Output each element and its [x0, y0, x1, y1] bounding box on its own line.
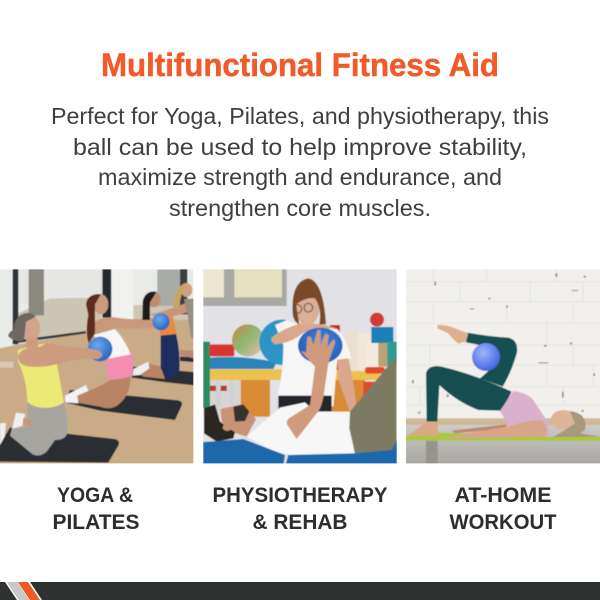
- description text: ball can be used to help improve stability,: [73, 134, 527, 160]
- title: Multifunctional Fitness Aid: [101, 47, 499, 83]
- woman in orange top: [133, 291, 197, 379]
- mats: [0, 357, 197, 463]
- label: at-home workout: WORKOUT: [450, 510, 556, 534]
- woman bridge pose: [407, 325, 600, 438]
- label: yoga and pilates: YOGA &: [57, 483, 133, 507]
- label: at-home workout: [450, 483, 556, 534]
- blue ball between legs: [472, 343, 500, 371]
- photo panel: at-home workout: [403, 266, 600, 467]
- foam rollers: [330, 313, 397, 400]
- patient: [204, 330, 397, 455]
- label: at-home workout: AT-HOME: [454, 483, 552, 507]
- exercise balls: [232, 324, 264, 356]
- woman in background: [173, 283, 197, 338]
- treatment table: [203, 438, 397, 464]
- therapist: [271, 278, 356, 413]
- label: physiotherapy and rehab: PHYSIOTHERAPY: [212, 483, 388, 507]
- woman in pink shorts: [65, 294, 165, 408]
- brick wall mortar: [403, 266, 600, 405]
- small blue ball one: [88, 337, 112, 361]
- description text: [51, 103, 549, 221]
- footer bar with stripes: [0, 582, 600, 600]
- description text: maximize strength and endurance, and: [98, 164, 502, 190]
- blue ball held by patient: [298, 328, 343, 364]
- label: physiotherapy and rehab: & REHAB: [252, 510, 348, 534]
- description text: strengthen core muscles.: [169, 195, 431, 221]
- woman in yellow top: [0, 313, 103, 456]
- small blue ball two: [152, 313, 170, 330]
- gym shelf: [200, 342, 380, 417]
- yoga mat: [403, 433, 600, 441]
- wall flecks: [412, 273, 595, 414]
- description text: Perfect for Yoga, Pilates, and physiotherapy, this: [51, 103, 549, 129]
- label: yoga and pilates: [52, 483, 140, 534]
- photo panel: yoga and pilates class: [0, 266, 197, 466]
- window: [200, 266, 287, 306]
- label: yoga and pilates: PILATES: [52, 510, 140, 534]
- label: physiotherapy and rehab: [212, 483, 388, 534]
- photo panel: physiotherapy and rehab: [200, 266, 400, 467]
